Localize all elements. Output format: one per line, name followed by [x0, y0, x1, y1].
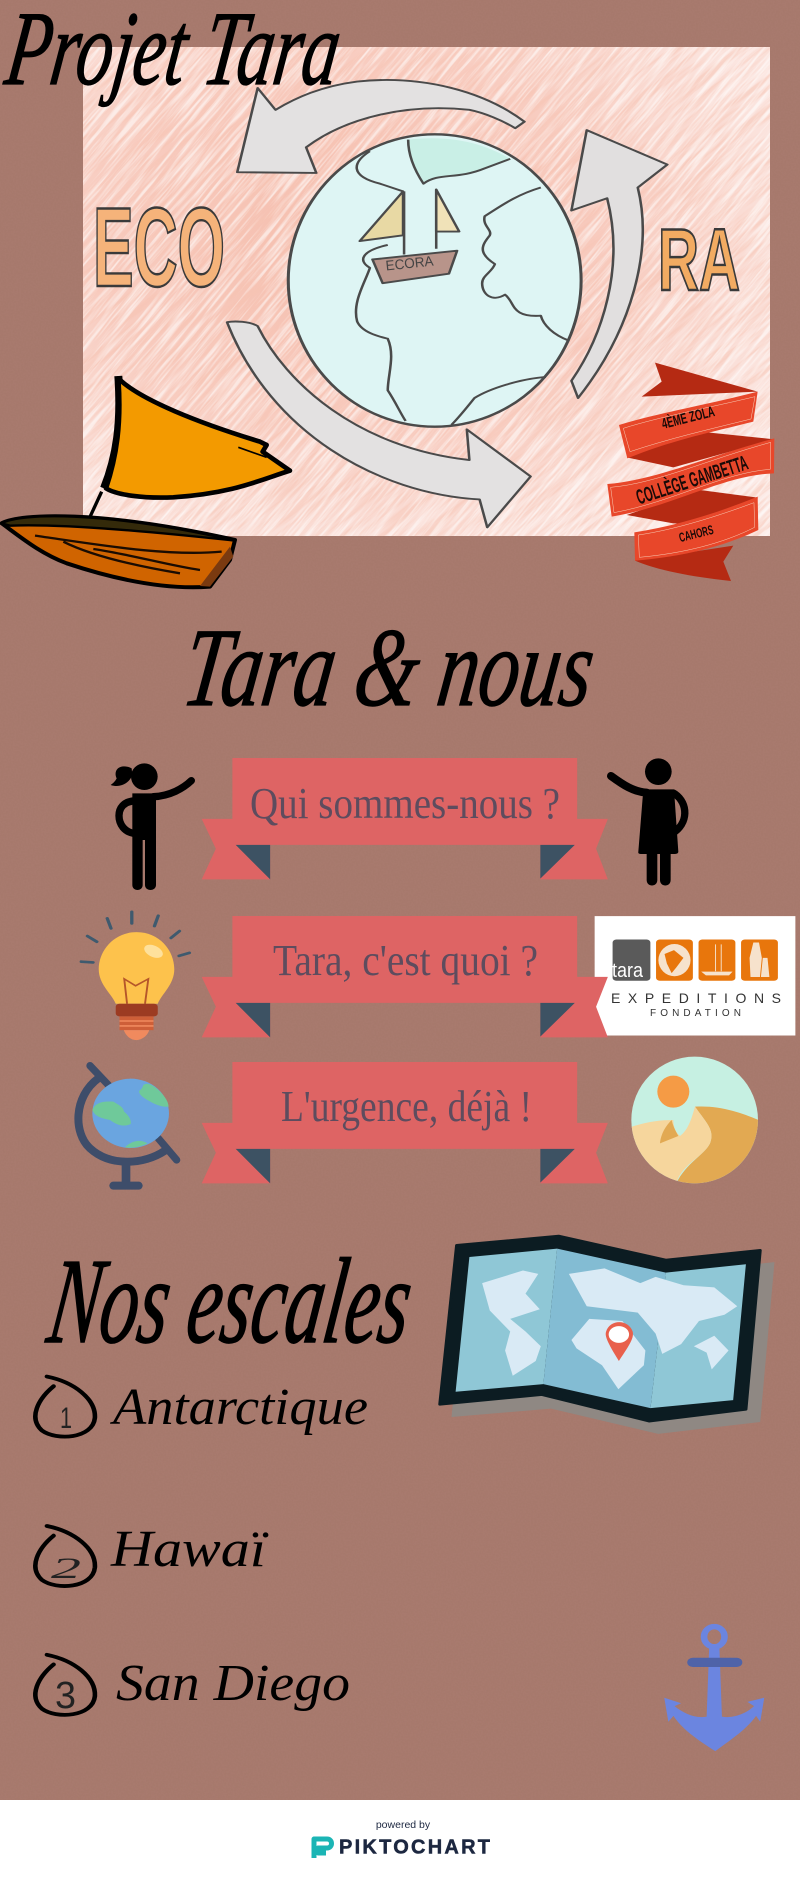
- list: stops: [35, 1377, 368, 1717]
- heading: Nos escales: Nos escales: [41, 1234, 420, 1369]
- icon: girl pointing: [111, 763, 191, 890]
- icon: anchor: [664, 1627, 764, 1751]
- globe: [288, 134, 581, 427]
- logo: Tara Expeditions: tara: [612, 960, 644, 982]
- stop 2: 2: [51, 1552, 81, 1585]
- arrow: right: [571, 130, 667, 398]
- banner: Qui sommes-nous ?: [202, 758, 608, 879]
- ribbon: school: [607, 363, 774, 581]
- icon: folded world map: [440, 1236, 774, 1434]
- banner: L'urgence, déjà !: L'urgence, déjà !: [281, 1082, 532, 1131]
- stop 1: 1: [60, 1402, 72, 1435]
- logo: Tara Expeditions: EXPEDITIONS: [611, 990, 781, 1006]
- footer brand: PIKTOCHART: [339, 1836, 490, 1858]
- logo: Tara Expeditions: FONDATION: [650, 1008, 741, 1019]
- footer text: powered by: [376, 1819, 431, 1831]
- stop 1: Antarctique: [110, 1379, 368, 1436]
- stop 1: [35, 1377, 368, 1437]
- logo: Tara Expeditions: [595, 916, 795, 1036]
- arrow: top: [237, 80, 524, 173]
- panel: hand-drawn ECORA poster: [83, 47, 770, 536]
- stop 2: Hawaï: [110, 1521, 269, 1578]
- ship drawing on the globe: [360, 189, 459, 283]
- banner: Qui sommes-nous ?: Qui sommes-nous ?: [250, 779, 560, 828]
- footer: powered by Piktochart: [0, 1800, 800, 1880]
- icon: light bulb: [81, 912, 189, 1040]
- icon: desert scene: [631, 1056, 758, 1184]
- lettering: RA: RA: [658, 210, 740, 309]
- stop 3: [35, 1655, 350, 1717]
- stop 3: 3: [55, 1675, 76, 1717]
- ribbon text: class: 4ÈME ZOLA: [660, 403, 717, 433]
- stop 2: [35, 1521, 269, 1586]
- stop 3: San Diego: [116, 1655, 350, 1712]
- icon: desk globe: [78, 1066, 177, 1186]
- banner: L'urgence, déjà !: [202, 1062, 608, 1183]
- icon: woman pointing: [611, 758, 685, 885]
- arrow: bottom: [227, 322, 531, 527]
- banner: Tara, c'est quoi ?: [202, 916, 608, 1037]
- ship label: ECORA: [385, 252, 435, 273]
- heading: Tara & nous: Tara & nous: [177, 606, 602, 730]
- icon: Piktochart mark: [314, 1839, 332, 1858]
- icon: sailing boat: [2, 376, 290, 587]
- lettering: ECO: ECO: [93, 185, 225, 310]
- banner: Tara, c'est quoi ?: Tara, c'est quoi ?: [273, 936, 538, 985]
- ribbon text: city: CAHORS: [677, 522, 715, 545]
